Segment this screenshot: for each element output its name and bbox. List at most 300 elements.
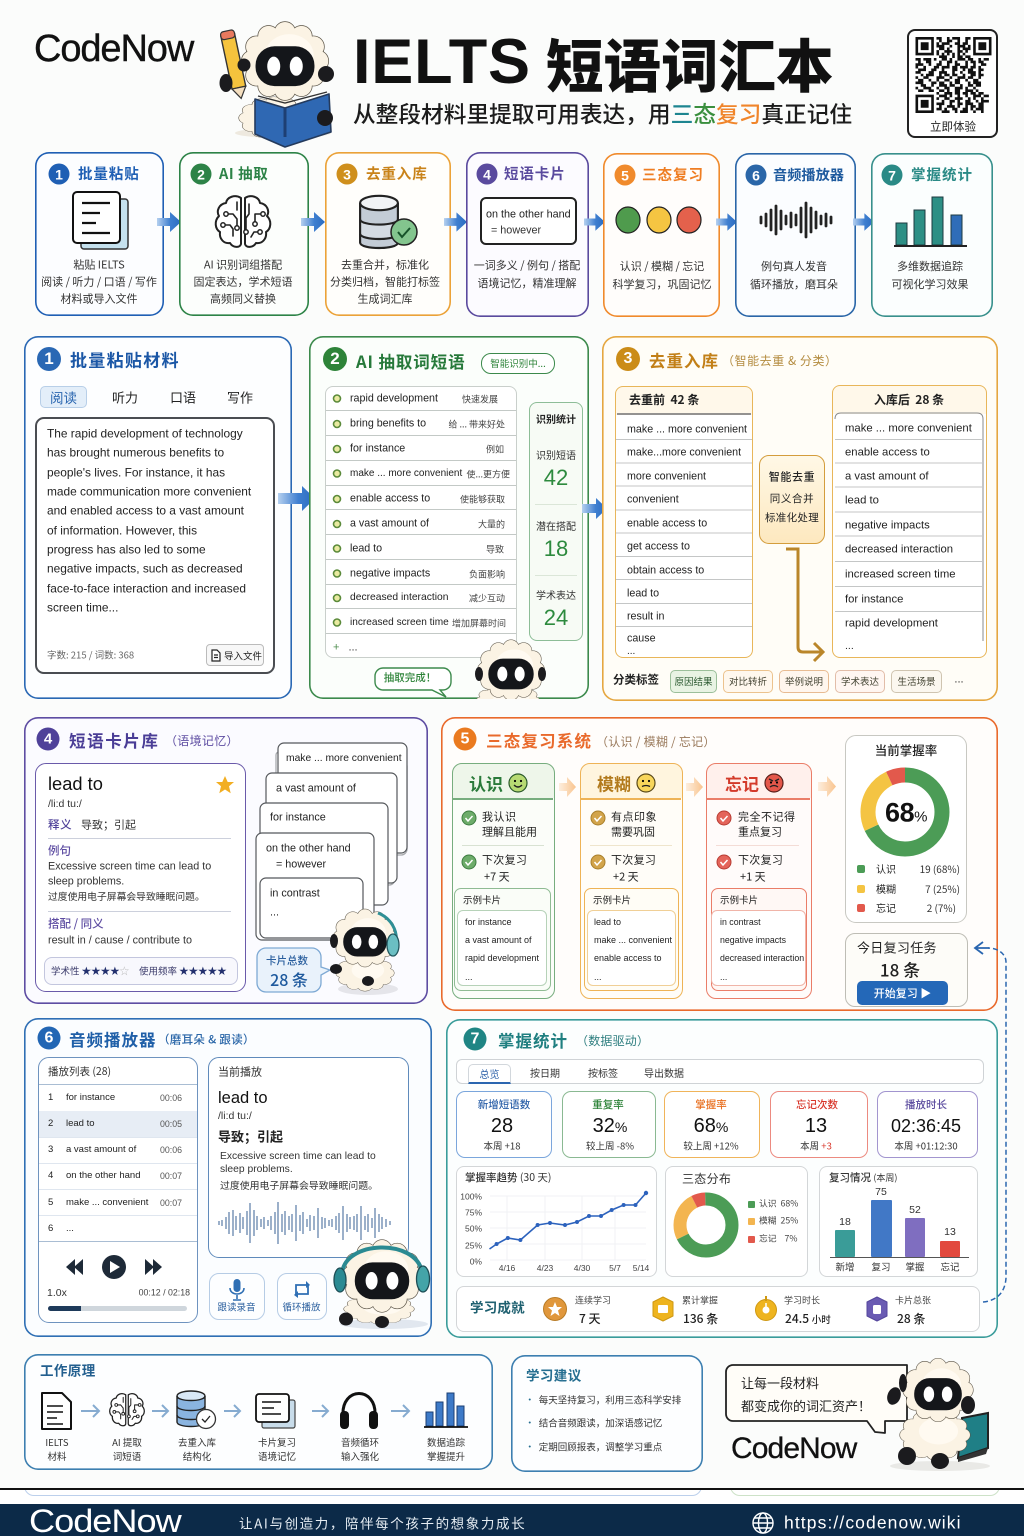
box text: 智能去重 bbox=[769, 468, 815, 484]
main card bbox=[35, 763, 246, 992]
arrow bbox=[81, 1404, 101, 1418]
label: IELTS 材料 bbox=[45, 1435, 69, 1463]
arrow bbox=[312, 1404, 330, 1418]
review chart panel bbox=[819, 1166, 978, 1277]
stat card: mastery bbox=[664, 1091, 760, 1158]
donut value: 68% bbox=[885, 798, 927, 828]
state text: 重点复习 bbox=[738, 824, 782, 840]
legend value: 19 (68%) bbox=[920, 861, 960, 876]
icon: flashcard bbox=[480, 197, 577, 245]
badge: 5 bbox=[461, 730, 469, 747]
example: Excessive screen time can lead to bbox=[220, 1151, 376, 1162]
meaning: 导致；引起 bbox=[218, 1126, 283, 1146]
bar label: 掌握 bbox=[905, 1259, 925, 1273]
after row: make ... more convenient bbox=[845, 422, 972, 434]
review heading: 复习情况 (本周) bbox=[829, 1170, 897, 1185]
tag: 原因结果 bbox=[674, 674, 712, 688]
legend bbox=[748, 1236, 755, 1243]
heading: 去重入库 bbox=[366, 163, 428, 184]
achievement label: 累计掌握 bbox=[682, 1294, 718, 1306]
heading: 掌握统计 bbox=[498, 1028, 568, 1052]
more row: + ... bbox=[333, 642, 358, 654]
header: logo: CodeNow bbox=[34, 28, 193, 70]
column: fuzzy bbox=[580, 763, 683, 999]
badge 4 bbox=[476, 164, 498, 184]
stat card: forgets bbox=[770, 1091, 868, 1158]
active tab bbox=[468, 1064, 511, 1084]
callout text: 抽取完成！ bbox=[384, 670, 436, 685]
badge bbox=[454, 728, 476, 750]
footer slogan: 让AI与创造力，陪伴每个孩子的想象力成长 bbox=[239, 1512, 526, 1532]
tab: 口语 bbox=[170, 388, 196, 406]
mascot with laptop bbox=[880, 1350, 1000, 1475]
QR code bbox=[916, 37, 992, 113]
trend heading: 掌握率趋势 (30 天) bbox=[465, 1170, 551, 1185]
after row: a vast amount of bbox=[845, 470, 929, 482]
after row: lead to bbox=[845, 494, 879, 506]
subheading: （语境记忆） bbox=[165, 732, 239, 749]
arrow bbox=[444, 212, 466, 232]
row 1: 00:06 bbox=[160, 1093, 182, 1103]
row separators bbox=[616, 413, 752, 627]
icon: brain bbox=[108, 1390, 146, 1430]
arrow bbox=[818, 776, 836, 797]
stat label: 学术表达 bbox=[536, 587, 576, 602]
stat label: 新增短语数 bbox=[478, 1097, 530, 1112]
box text: 标准化处理 bbox=[765, 510, 819, 525]
row 3: a vast amount of bbox=[66, 1144, 136, 1155]
sample cards bbox=[711, 888, 807, 991]
legend bbox=[857, 865, 865, 873]
icon: brain bbox=[214, 195, 272, 248]
button label: 导入文件 bbox=[224, 648, 262, 662]
stats heading: 识别统计 bbox=[536, 411, 576, 426]
badge 2 bbox=[190, 164, 212, 184]
active tab: 总览 bbox=[480, 1066, 500, 1081]
tag: 生活场景 bbox=[897, 674, 936, 688]
QR caption: 立即体验 bbox=[930, 118, 976, 134]
icon: check bbox=[590, 854, 606, 870]
label: 卡片复习 语境记忆 bbox=[258, 1435, 296, 1463]
icon: loop bbox=[293, 1281, 311, 1298]
bar label: 复习 bbox=[871, 1259, 891, 1273]
state text: 需要巩固 bbox=[611, 824, 655, 840]
badge: 3 bbox=[624, 350, 632, 367]
frequency rating: 使用频率 ★★★★★ bbox=[139, 963, 227, 977]
stat delta: 本周 +3 bbox=[800, 1138, 832, 1152]
title: IELTS bbox=[353, 27, 531, 97]
stat delta: 本周 +01:12:30 bbox=[894, 1138, 958, 1152]
heading: 工作原理 bbox=[40, 1359, 96, 1379]
legend label: 认识 bbox=[876, 861, 896, 876]
sample list: lead to make ... convenient enable access to ... bbox=[594, 917, 672, 982]
description: 例句真人发音 循环播放，磨耳朵 bbox=[750, 258, 838, 292]
tab: 按标签 bbox=[588, 1065, 618, 1080]
sample list bbox=[457, 910, 547, 986]
example: sleep problems. bbox=[220, 1164, 293, 1175]
icon: document bbox=[72, 191, 129, 250]
state text: 有点印象 bbox=[611, 808, 657, 824]
arrow: panel 2 to 3 bbox=[582, 498, 602, 519]
legend text: 忘记 7% bbox=[759, 1232, 797, 1245]
row 4: on the other hand bbox=[66, 1170, 140, 1181]
before list bbox=[615, 386, 753, 658]
stat delta: 本周 +18 bbox=[484, 1138, 520, 1152]
icon: card medal bbox=[866, 1297, 888, 1321]
row 1: 1 bbox=[48, 1092, 53, 1103]
before row: get access to bbox=[627, 541, 690, 553]
callout bbox=[374, 667, 452, 698]
icon: database bbox=[176, 1390, 218, 1430]
meaning: 导致 bbox=[486, 542, 504, 555]
waveform bbox=[218, 1202, 394, 1244]
task heading: 今日复习任务 bbox=[857, 938, 937, 956]
meaning: 大量的 bbox=[478, 518, 505, 530]
bar value: 75 bbox=[875, 1186, 887, 1198]
arrow bbox=[301, 212, 325, 232]
column title: 模糊 bbox=[597, 770, 631, 796]
row 5: 00:07 bbox=[160, 1198, 182, 1208]
panel 6: audio player bbox=[24, 1018, 432, 1337]
legend value: 7 (25%) bbox=[925, 881, 960, 896]
bar label: 新增 bbox=[835, 1259, 855, 1273]
essay text: The rapid development of technology has brought numerous benefits to people's lives. For instance, it has made communication more convenient and enabled access to a vast amount of information. However, this progress has also led to some negative impacts, such as decreased face-to-face interaction and increased screen time... bbox=[47, 426, 251, 614]
legend bbox=[857, 904, 865, 912]
row 6: ... bbox=[66, 1223, 74, 1234]
tag bbox=[891, 670, 942, 693]
word: lead to bbox=[218, 1089, 268, 1107]
bar chart bbox=[829, 1198, 971, 1260]
panel: study advice bbox=[511, 1355, 703, 1472]
mastery panel bbox=[845, 735, 967, 923]
row separators bbox=[326, 410, 516, 634]
after row: rapid development bbox=[845, 617, 938, 629]
next review days: +7 天 bbox=[484, 868, 510, 884]
rating bar bbox=[44, 957, 238, 985]
stat value: 24 bbox=[544, 605, 568, 630]
row 3: 3 bbox=[48, 1144, 53, 1155]
icon: traffic lights bbox=[615, 206, 702, 234]
step 3 card bbox=[325, 152, 451, 316]
stat label: 重复率 bbox=[592, 1097, 624, 1112]
icon: waveform bbox=[760, 202, 832, 238]
next review: 下次复习 bbox=[611, 852, 656, 868]
x label: 4/30 bbox=[574, 1263, 590, 1273]
bar value: 13 bbox=[944, 1226, 956, 1238]
mastery heading: 当前掌握率 bbox=[875, 740, 937, 759]
tag bbox=[835, 670, 885, 693]
meaning: 使能够获取 bbox=[460, 492, 505, 506]
mascot with headphones bbox=[330, 908, 400, 995]
sample list: for instance a vast amount of rapid development ... bbox=[465, 917, 539, 982]
button label: 循环播放 bbox=[282, 1299, 321, 1313]
meaning: 增加屏幕时间 bbox=[452, 616, 506, 629]
step 6 card bbox=[735, 153, 856, 317]
time: 00:12 / 02:18 bbox=[139, 1288, 190, 1298]
stat label: 识别短语 bbox=[536, 447, 576, 462]
footer bbox=[0, 1488, 1024, 1536]
card text: = however bbox=[491, 225, 541, 237]
description: 去重合并，标准化 分类归档，智能打标签 生成词汇库 bbox=[330, 256, 440, 306]
icon: star bbox=[216, 776, 234, 794]
icon: check bbox=[716, 809, 732, 826]
after more: ... bbox=[845, 640, 854, 652]
total cards bubble bbox=[256, 947, 330, 993]
badge bbox=[464, 1028, 486, 1050]
row 3: 00:06 bbox=[160, 1145, 182, 1155]
achievement value: 28 条 bbox=[897, 1310, 925, 1327]
collocations: result in / cause / contribute to bbox=[48, 935, 192, 947]
tag: 学术表达 bbox=[841, 674, 879, 688]
icon: smile bbox=[508, 773, 528, 793]
subtitle: 从整段材料里提取可用表达，用三态复习真正记住 bbox=[353, 97, 852, 130]
badge bbox=[36, 728, 60, 750]
badge: 7 bbox=[471, 1030, 479, 1047]
speed: 1.0x bbox=[47, 1287, 67, 1299]
smart dedupe box bbox=[759, 455, 825, 544]
badge 1: 1 bbox=[55, 166, 63, 182]
stack card text: for instance bbox=[270, 812, 326, 824]
sample label: 示例卡片 bbox=[463, 892, 501, 906]
example: sleep problems. bbox=[48, 876, 124, 888]
trend chart panel bbox=[456, 1166, 657, 1277]
stat value: 13 bbox=[805, 1115, 827, 1137]
more tags: ... bbox=[954, 674, 964, 686]
highlighted row bbox=[39, 1111, 197, 1137]
word count: 字数: 215 / 词数: 368 bbox=[47, 647, 134, 661]
arrow bbox=[716, 213, 735, 231]
flow arrow bbox=[786, 548, 825, 662]
column title: 认识 bbox=[469, 770, 503, 796]
after heading: 入库后 28 条 bbox=[874, 391, 944, 408]
stat value: 32% bbox=[593, 1115, 627, 1137]
description: 粘贴 IELTS 阅读 / 听力 / 口语 / 写作 材料或导入文件 bbox=[41, 256, 157, 306]
x label: 4/16 bbox=[499, 1263, 515, 1273]
row 3 bbox=[48, 1144, 182, 1156]
meaning: 给 ... 带来好处 bbox=[448, 418, 505, 430]
speech bubble bbox=[725, 1364, 911, 1434]
stack card text: a vast amount of bbox=[276, 783, 356, 795]
phrase: for instance: for instance bbox=[350, 443, 405, 455]
phrase: bring benefits to: bring benefits to bbox=[350, 418, 426, 430]
tab: 写作 bbox=[227, 388, 253, 406]
stack card text: on the other hand bbox=[266, 843, 351, 855]
footer url: https://codenow.wiki bbox=[784, 1512, 962, 1532]
badge 2: 2 bbox=[197, 166, 205, 182]
example translation: 过度使用电子屏幕会导致睡眠问题。 bbox=[48, 889, 205, 903]
badge 1 bbox=[48, 164, 70, 184]
stats sidebar bbox=[529, 402, 583, 641]
row 4: 00:07 bbox=[160, 1171, 182, 1181]
legend text: 认识 68% bbox=[759, 1197, 798, 1210]
loop button bbox=[277, 1273, 327, 1320]
before row: cause bbox=[627, 633, 656, 645]
meaning: 导致；引起 bbox=[81, 816, 136, 832]
tag bbox=[670, 670, 717, 693]
sample cards bbox=[584, 888, 679, 991]
badge bbox=[38, 1026, 60, 1050]
after list bbox=[832, 385, 987, 658]
icon: check bbox=[716, 853, 732, 870]
heading: 掌握统计 bbox=[911, 164, 973, 185]
trend line chart bbox=[486, 1190, 650, 1264]
bubble text: 让每一段材料 都变成你的词汇资产！ bbox=[741, 1373, 871, 1415]
phrase: negative impacts: negative impacts bbox=[350, 567, 430, 579]
badge 7 bbox=[882, 164, 902, 186]
label: 去重入库 结构化 bbox=[178, 1435, 216, 1463]
row 5: make ... convenient bbox=[66, 1197, 148, 1208]
now playing box bbox=[208, 1057, 409, 1258]
advice item: • 结合音频跟读，加深语感记忆 bbox=[525, 1415, 662, 1429]
title bbox=[353, 20, 834, 104]
trend y labels: 100% 75% 50% 25% 0% bbox=[460, 1191, 482, 1266]
before row: obtain access to bbox=[627, 564, 704, 576]
next review: 下次复习 bbox=[482, 852, 527, 868]
description: 多维数据追踪 可视化学习效果 bbox=[892, 258, 968, 292]
box text: 同义合并 bbox=[770, 491, 814, 506]
icon: book medal bbox=[652, 1297, 674, 1321]
before row: convenient bbox=[627, 494, 679, 506]
next review days: +2 天 bbox=[613, 868, 639, 884]
badge 4: 4 bbox=[483, 166, 491, 182]
achievements bar bbox=[456, 1286, 980, 1332]
badge 5 bbox=[614, 164, 636, 186]
meaning: 使...更方便 bbox=[466, 467, 510, 480]
arrow bbox=[391, 1404, 411, 1418]
icon: angry bbox=[764, 773, 784, 793]
start button: 开始复习 ▶ bbox=[874, 985, 931, 1001]
badge: 2 bbox=[330, 349, 340, 368]
row separators bbox=[834, 412, 984, 641]
heading: AI 抽取 bbox=[219, 163, 268, 184]
before row: more convenient bbox=[627, 471, 706, 483]
badge 7: 7 bbox=[888, 167, 896, 183]
state text: 完全不记得 bbox=[738, 808, 796, 824]
next review: 下次复习 bbox=[738, 852, 783, 868]
achievement value: 7 天 bbox=[579, 1310, 601, 1327]
stat delta: 较上周 -8% bbox=[586, 1138, 634, 1152]
active tab bbox=[40, 386, 87, 408]
meaning: 例如 bbox=[486, 442, 504, 456]
phrase: lead to: lead to bbox=[350, 542, 382, 554]
arrow bbox=[157, 212, 179, 232]
row 1 bbox=[48, 1092, 182, 1104]
row 2: 00:05 bbox=[160, 1119, 182, 1129]
bar value: 52 bbox=[909, 1204, 921, 1216]
sample label: 示例卡片 bbox=[720, 892, 758, 906]
legend bbox=[748, 1218, 755, 1225]
phrase: rapid development: rapid development bbox=[350, 392, 438, 404]
heading: 短语卡片库 bbox=[69, 728, 160, 752]
tag bbox=[779, 670, 829, 693]
row 4: 4 bbox=[48, 1170, 53, 1181]
row 6 bbox=[48, 1223, 182, 1235]
icon: bars bbox=[424, 1392, 468, 1428]
after row: enable access to bbox=[845, 446, 930, 458]
row 2: 2 bbox=[48, 1118, 53, 1129]
task value: 18 条 bbox=[880, 956, 920, 982]
distribution heading: 三态分布 bbox=[682, 1170, 731, 1187]
icon: cards bbox=[255, 1393, 297, 1429]
advice item: • 每天坚持复习，利用三态科学安排 bbox=[525, 1392, 681, 1406]
arrow bbox=[853, 213, 871, 231]
mascot bbox=[475, 640, 546, 699]
description: 一词多义 / 例句 / 搭配 语境记忆，精准理解 bbox=[474, 257, 580, 291]
row 1: for instance bbox=[66, 1092, 115, 1103]
tag bbox=[723, 670, 773, 693]
example translation: 过度使用电子屏幕会导致睡眠问题。 bbox=[220, 1178, 378, 1192]
before row: make ... more convenient bbox=[627, 423, 747, 435]
stat label: 潜在搭配 bbox=[536, 518, 576, 533]
sample label: 示例卡片 bbox=[593, 892, 631, 906]
mascot: reading with pencil bbox=[220, 21, 334, 148]
playlist box bbox=[38, 1057, 198, 1323]
achievement value: 24.5 小时 bbox=[785, 1310, 831, 1327]
legend label: 忘记 bbox=[876, 900, 896, 915]
step 2 card bbox=[179, 152, 309, 316]
stat label: 掌握率 bbox=[695, 1097, 727, 1112]
card text: on the other hand bbox=[486, 209, 571, 221]
meaning: 减少互动 bbox=[469, 592, 505, 604]
start button bbox=[857, 981, 948, 1005]
icon: microphone bbox=[229, 1279, 245, 1301]
before more: ... bbox=[627, 646, 635, 657]
phrase: make more convenient: make ... more convenient bbox=[350, 468, 462, 478]
phrase: decreased interaction: decreased interaction bbox=[350, 592, 448, 603]
legend bbox=[857, 885, 865, 893]
icon: neutral bbox=[636, 773, 656, 793]
next review days: +1 天 bbox=[740, 868, 766, 884]
phonetic: /li:d tu:/ bbox=[48, 798, 82, 810]
tab: 听力 bbox=[112, 388, 138, 406]
step 7 card bbox=[871, 153, 993, 317]
before row: make...more convenient bbox=[627, 447, 741, 459]
column title: 忘记 bbox=[725, 770, 759, 796]
achievement value: 136 条 bbox=[683, 1310, 718, 1327]
tab: 导出数据 bbox=[644, 1065, 684, 1080]
tab bar bbox=[456, 1059, 984, 1084]
subheading: （认识 / 模糊 / 忘记） bbox=[596, 733, 716, 750]
arrow bbox=[152, 1404, 170, 1418]
column: forgot bbox=[706, 763, 812, 999]
collocations label: 搭配 / 同义 bbox=[48, 915, 104, 931]
tag: 举例说明 bbox=[785, 674, 823, 688]
meaning label: 释义 bbox=[48, 816, 72, 832]
badge: 6 bbox=[45, 1029, 53, 1046]
before row: result in bbox=[627, 610, 664, 622]
row 5: 5 bbox=[48, 1197, 53, 1208]
stack card text: in contrast bbox=[270, 888, 320, 900]
icon: star medal bbox=[543, 1297, 567, 1321]
icon: document bbox=[40, 1392, 72, 1430]
badge 3 bbox=[336, 164, 358, 184]
before row: enable access to bbox=[627, 518, 707, 530]
badge bbox=[616, 347, 640, 371]
label: AI 提取 词短语 bbox=[112, 1435, 142, 1463]
panel 7: stats bbox=[446, 1019, 998, 1338]
after row: for instance bbox=[845, 593, 903, 605]
follow-read button bbox=[209, 1273, 265, 1320]
arrow bbox=[559, 777, 576, 797]
after row: decreased interaction bbox=[845, 543, 953, 555]
description: 认识 / 模糊 / 忘记 科学复习，巩固记忆 bbox=[612, 258, 712, 292]
stat value: 68% bbox=[694, 1115, 728, 1137]
stat value: 28 bbox=[491, 1115, 513, 1137]
after row: negative impacts bbox=[845, 519, 930, 531]
stack card text: = however bbox=[276, 859, 326, 871]
heading: 批量粘贴材料 bbox=[70, 346, 180, 372]
tag: 对比转折 bbox=[729, 674, 767, 688]
